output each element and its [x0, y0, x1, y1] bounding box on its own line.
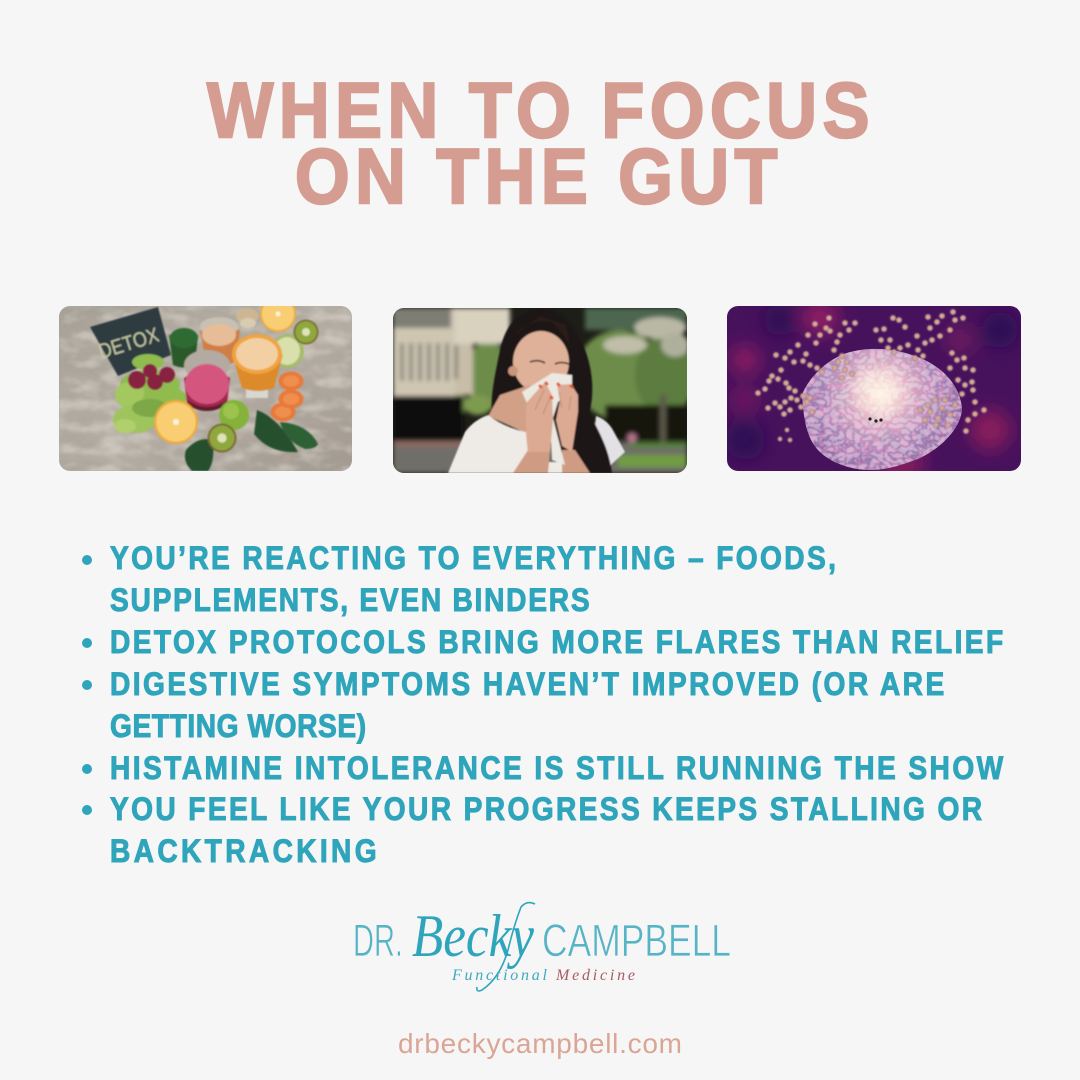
- logo: Dr. Becky Campbell Functional Medicine: CAMPBELL: [542, 915, 731, 966]
- neck and chest: [488, 385, 530, 435]
- ginger: [236, 308, 258, 328]
- logo: Dr. Becky Campbell Functional Medicine: Medicine: [555, 967, 635, 984]
- photo: mast cell releasing granules: [727, 306, 1021, 471]
- lettuce: [113, 354, 187, 433]
- logo: Dr. Becky Campbell Functional Medicine: Functional: [451, 967, 548, 984]
- orange half, top: [259, 306, 297, 333]
- kiwi, bottom: [208, 424, 236, 452]
- title: WHEN TO FOCUS: [207, 67, 869, 154]
- bullet 1: SUPPLEMENTS, EVEN BINDERS: [110, 583, 590, 618]
- chalkboard sign: DETOX: [96, 324, 162, 364]
- ground: [393, 395, 687, 473]
- green juice glass: [169, 328, 198, 368]
- white shirt: [448, 415, 575, 473]
- bullet 5: BACKTRACKING: [110, 834, 377, 869]
- buildings: [393, 308, 510, 398]
- hands: [526, 382, 578, 452]
- finger lines and nails: [535, 390, 571, 414]
- chalkboard sign: [90, 307, 171, 376]
- bullet 3: GETTING WORSE): [110, 709, 366, 744]
- small orange juice glass: [200, 317, 240, 365]
- cell body: [800, 345, 965, 473]
- face: [508, 316, 570, 393]
- kiwi, top: [294, 320, 318, 344]
- title: ON THE GUT: [295, 133, 777, 220]
- granules: [755, 309, 987, 442]
- bullet 4: HISTAMINE INTOLERANCE IS STILL RUNNING THE SHOW: [110, 751, 1004, 786]
- logo: Dr. Becky Campbell Functional Medicine: Becky: [412, 903, 534, 969]
- pink juice glass: [184, 350, 230, 411]
- lime: [219, 400, 249, 430]
- hair: [492, 308, 612, 473]
- cucumber: [272, 334, 304, 368]
- bullet 1: [82, 541, 836, 618]
- photo: woman sneezing into tissue: [393, 308, 695, 473]
- trees: [453, 308, 687, 420]
- bullet 3: DIGESTIVE SYMPTOMS HAVEN’T IMPROVED (OR ARE: [110, 667, 944, 702]
- photo: detox juices and vegetables: [59, 296, 352, 471]
- bullet 5: [82, 792, 982, 869]
- carrot slices: [270, 372, 304, 422]
- tissue: [522, 373, 572, 465]
- beets: [128, 364, 175, 390]
- website url: drbeckycampbell.com: [398, 1028, 682, 1059]
- bullet 2: DETOX PROTOCOLS BRING MORE FLARES THAN RELIEF: [110, 625, 1003, 660]
- bullet list: [82, 541, 1004, 869]
- bullet 3: [82, 667, 944, 744]
- title: [207, 67, 869, 220]
- forearms: [513, 450, 590, 473]
- large orange juice glass: [232, 334, 283, 398]
- bullet 1: YOU’RE REACTING TO EVERYTHING – FOODS,: [110, 541, 836, 576]
- right sleeve: [594, 415, 626, 466]
- logo: Dr. Becky Campbell Functional Medicine: [353, 903, 731, 991]
- orange half, bottom: [154, 400, 198, 444]
- logo: Dr. Becky Campbell Functional Medicine: DR.: [353, 915, 403, 966]
- bullet 5: YOU FEEL LIKE YOUR PROGRESS KEEPS STALLING OR: [110, 792, 982, 827]
- spinach leaves: [185, 410, 318, 471]
